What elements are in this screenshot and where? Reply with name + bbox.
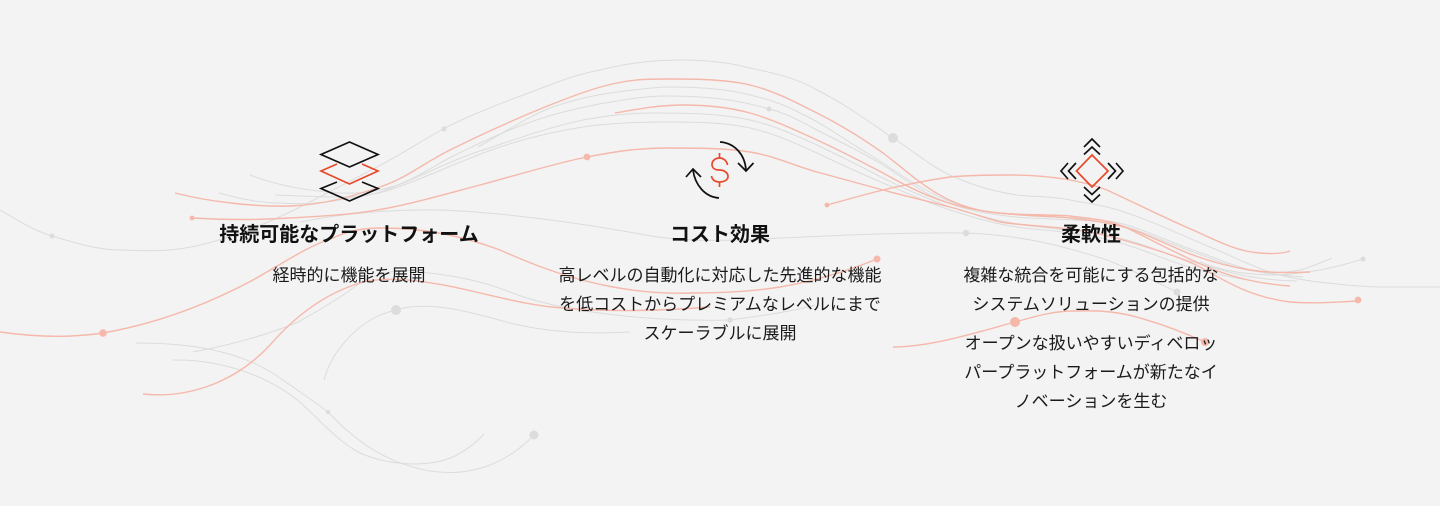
panel: sustainable platform [219,141,479,285]
coral flow curves [0,79,1358,395]
coral nodes [99,154,1361,346]
icon: stacked layers [319,141,380,202]
icon: dollar with cycle arrows [685,141,754,199]
panel: cost effectiveness [558,141,882,343]
panel: flexibility [963,138,1219,411]
heading: 持続可能なプラットフォーム [219,224,479,246]
description: システムソリューションの提供 [972,295,1210,314]
heading: 柔軟性 [1061,224,1121,246]
icon: diamond with outward chevrons [1060,138,1124,204]
description [558,266,882,343]
description: 経時的に機能を展開 [272,266,426,285]
description: パープラットフォームが新たなイ [964,363,1218,382]
description: ノベーションを生む [1015,392,1167,411]
gray nodes [50,106,1366,440]
description: 高レベルの自動化に対応した先進的な機能 [558,266,882,285]
description: 複雑な統合を可能にする包括的な [963,266,1219,285]
description: を低コストからプレミアムなレベルにまで [559,295,881,314]
description [963,266,1219,411]
heading: コスト効果 [670,224,770,246]
description: オープンな扱いやすいディベロッ [965,334,1217,353]
description: スケーラブルに展開 [644,324,796,343]
